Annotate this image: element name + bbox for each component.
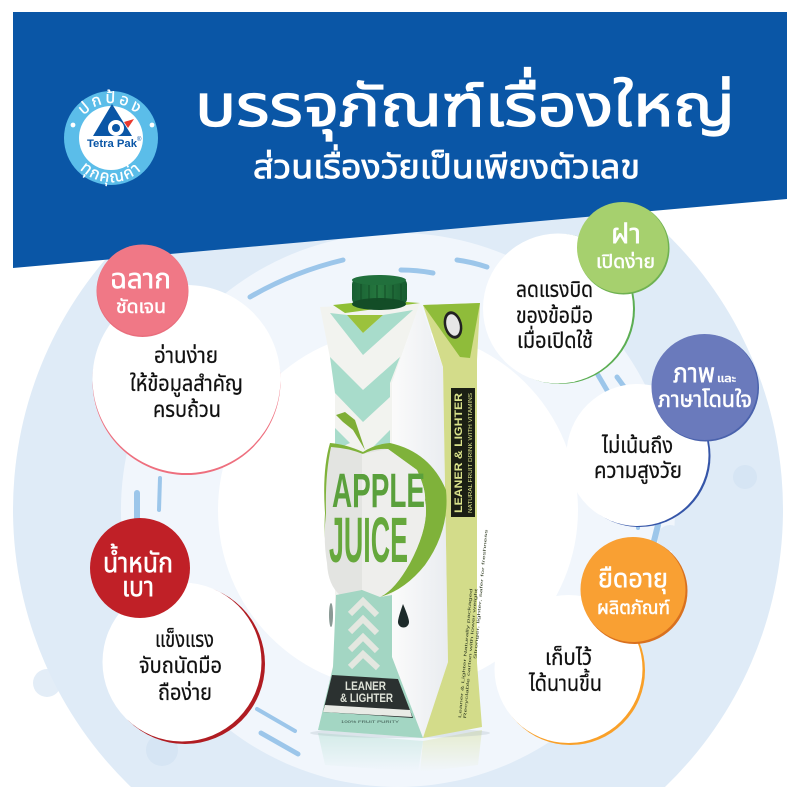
carton reflection (310, 728, 490, 772)
logo: Tetra Pak badge: ® (137, 136, 142, 143)
body text: ไม่เน้นถึง (601, 433, 673, 458)
side small text: Recyclable carton with lower weight (462, 587, 478, 719)
panel: light weight (90, 518, 265, 744)
white strip (323, 705, 412, 717)
product: juice carton (310, 275, 490, 772)
orange heading badge (580, 537, 688, 644)
body text (516, 277, 593, 353)
pink heading badge: ฉลาก (110, 263, 171, 294)
body text: ลดแรงบิด (516, 277, 593, 302)
red heading badge: น้ำหนัก (103, 543, 173, 578)
apple white body (325, 447, 426, 597)
white circle (483, 234, 633, 384)
panel: clear label (92, 244, 280, 475)
subtitle: ส่วนเรื่องวัยเป็นเพียงตัวเลข (253, 144, 640, 185)
mint chevrons (330, 310, 413, 450)
green crescent (485, 234, 635, 384)
purple heading badge: ภาษาโดนใจ (658, 387, 752, 412)
purple heading badge: ภาพ (673, 358, 715, 388)
orange heading badge: ยืดอายุ (598, 563, 668, 594)
red heading badge: เบา (122, 571, 154, 602)
upward chevrons (350, 601, 378, 668)
pink crescent (92, 287, 280, 475)
green heading badge: เปิดง่าย (596, 250, 655, 273)
blue arc dashes (137, 260, 658, 754)
body text (139, 627, 222, 705)
body text: ความสูงวัย (594, 458, 682, 484)
panel: image and language (566, 334, 759, 527)
title: บรรจุภัณฑ์เรื่องใหญ่ (195, 67, 735, 141)
side black label (451, 388, 475, 517)
panel heading line two: & LIGHTER (340, 691, 393, 705)
green heading badge (577, 202, 670, 294)
body text (594, 433, 682, 484)
body text (130, 343, 243, 422)
green heading badge: ฝา (611, 218, 641, 249)
apple label text: APPLE (332, 465, 425, 518)
water drop (398, 604, 409, 628)
body text: จับถนัดมือ (139, 653, 222, 678)
side small text: Stronger, lighter, safer for freshness (472, 529, 489, 659)
body text: เก็บไว้ (545, 645, 592, 670)
fine print: 100% FRUIT PURITY (341, 719, 399, 724)
carton front panel (318, 303, 423, 738)
apple green outline (324, 443, 447, 597)
purple heading badge (652, 334, 759, 442)
pink heading badge: ชัดเจน (116, 297, 166, 318)
body text: ให้ข้อมูลสำคัญ (130, 371, 243, 397)
background ring (13, 125, 783, 787)
logo: Tetra Pak badge: ปกป้อง (78, 89, 140, 114)
logo: Tetra Pak badge (64, 89, 158, 186)
red crescent (105, 584, 265, 744)
body text (528, 645, 602, 696)
side black label: LEANER & LIGHTER (453, 393, 465, 513)
green flap (423, 303, 480, 358)
blue crescent (568, 385, 710, 527)
panel: easy open cap (483, 202, 670, 384)
black panel (323, 675, 413, 718)
carton side panel white (392, 303, 448, 738)
red heading badge (90, 518, 190, 618)
side small text (457, 528, 489, 719)
side black label: NATURAL FRUIT DRINK WITH VITAMINS (468, 392, 474, 513)
header banner (13, 12, 787, 268)
pink heading badge (96, 244, 188, 337)
body text: ของข้อมือ (516, 303, 593, 328)
side small text: Leaner & Lighter Naturally packaged (457, 588, 473, 718)
product: juice carton: JUICE (329, 504, 408, 576)
logo: Tetra Pak badge: Tetra Pak (87, 138, 138, 150)
panel: shelf life (494, 537, 688, 745)
body text: ครบถ้วน (153, 397, 221, 422)
white circle (566, 384, 708, 526)
white circle (102, 582, 262, 742)
body text: แข็งแรง (155, 627, 214, 652)
body text: ได้นานขึ้น (528, 668, 602, 696)
orange heading badge: ผลิตภัณฑ์ (597, 598, 670, 619)
orange crescent (496, 596, 645, 745)
lower mint panel (318, 590, 423, 738)
purple heading badge: และ (717, 373, 736, 385)
body text: ถือง่าย (158, 680, 212, 705)
body text: เมื่อเปิดใช้ (517, 325, 593, 353)
panel heading: LEANER (345, 679, 386, 693)
flap sticker (441, 309, 465, 341)
body text: อ่านง่าย (154, 343, 218, 368)
carton top fold (333, 300, 420, 313)
white circle (494, 595, 642, 743)
olive triangle (347, 315, 383, 333)
white circle (92, 285, 280, 473)
logo: Tetra Pak badge: ทุกคุณค่า (80, 163, 140, 186)
carton side panel yellow (423, 303, 482, 738)
cap (352, 275, 407, 310)
apple leaf (336, 412, 365, 450)
